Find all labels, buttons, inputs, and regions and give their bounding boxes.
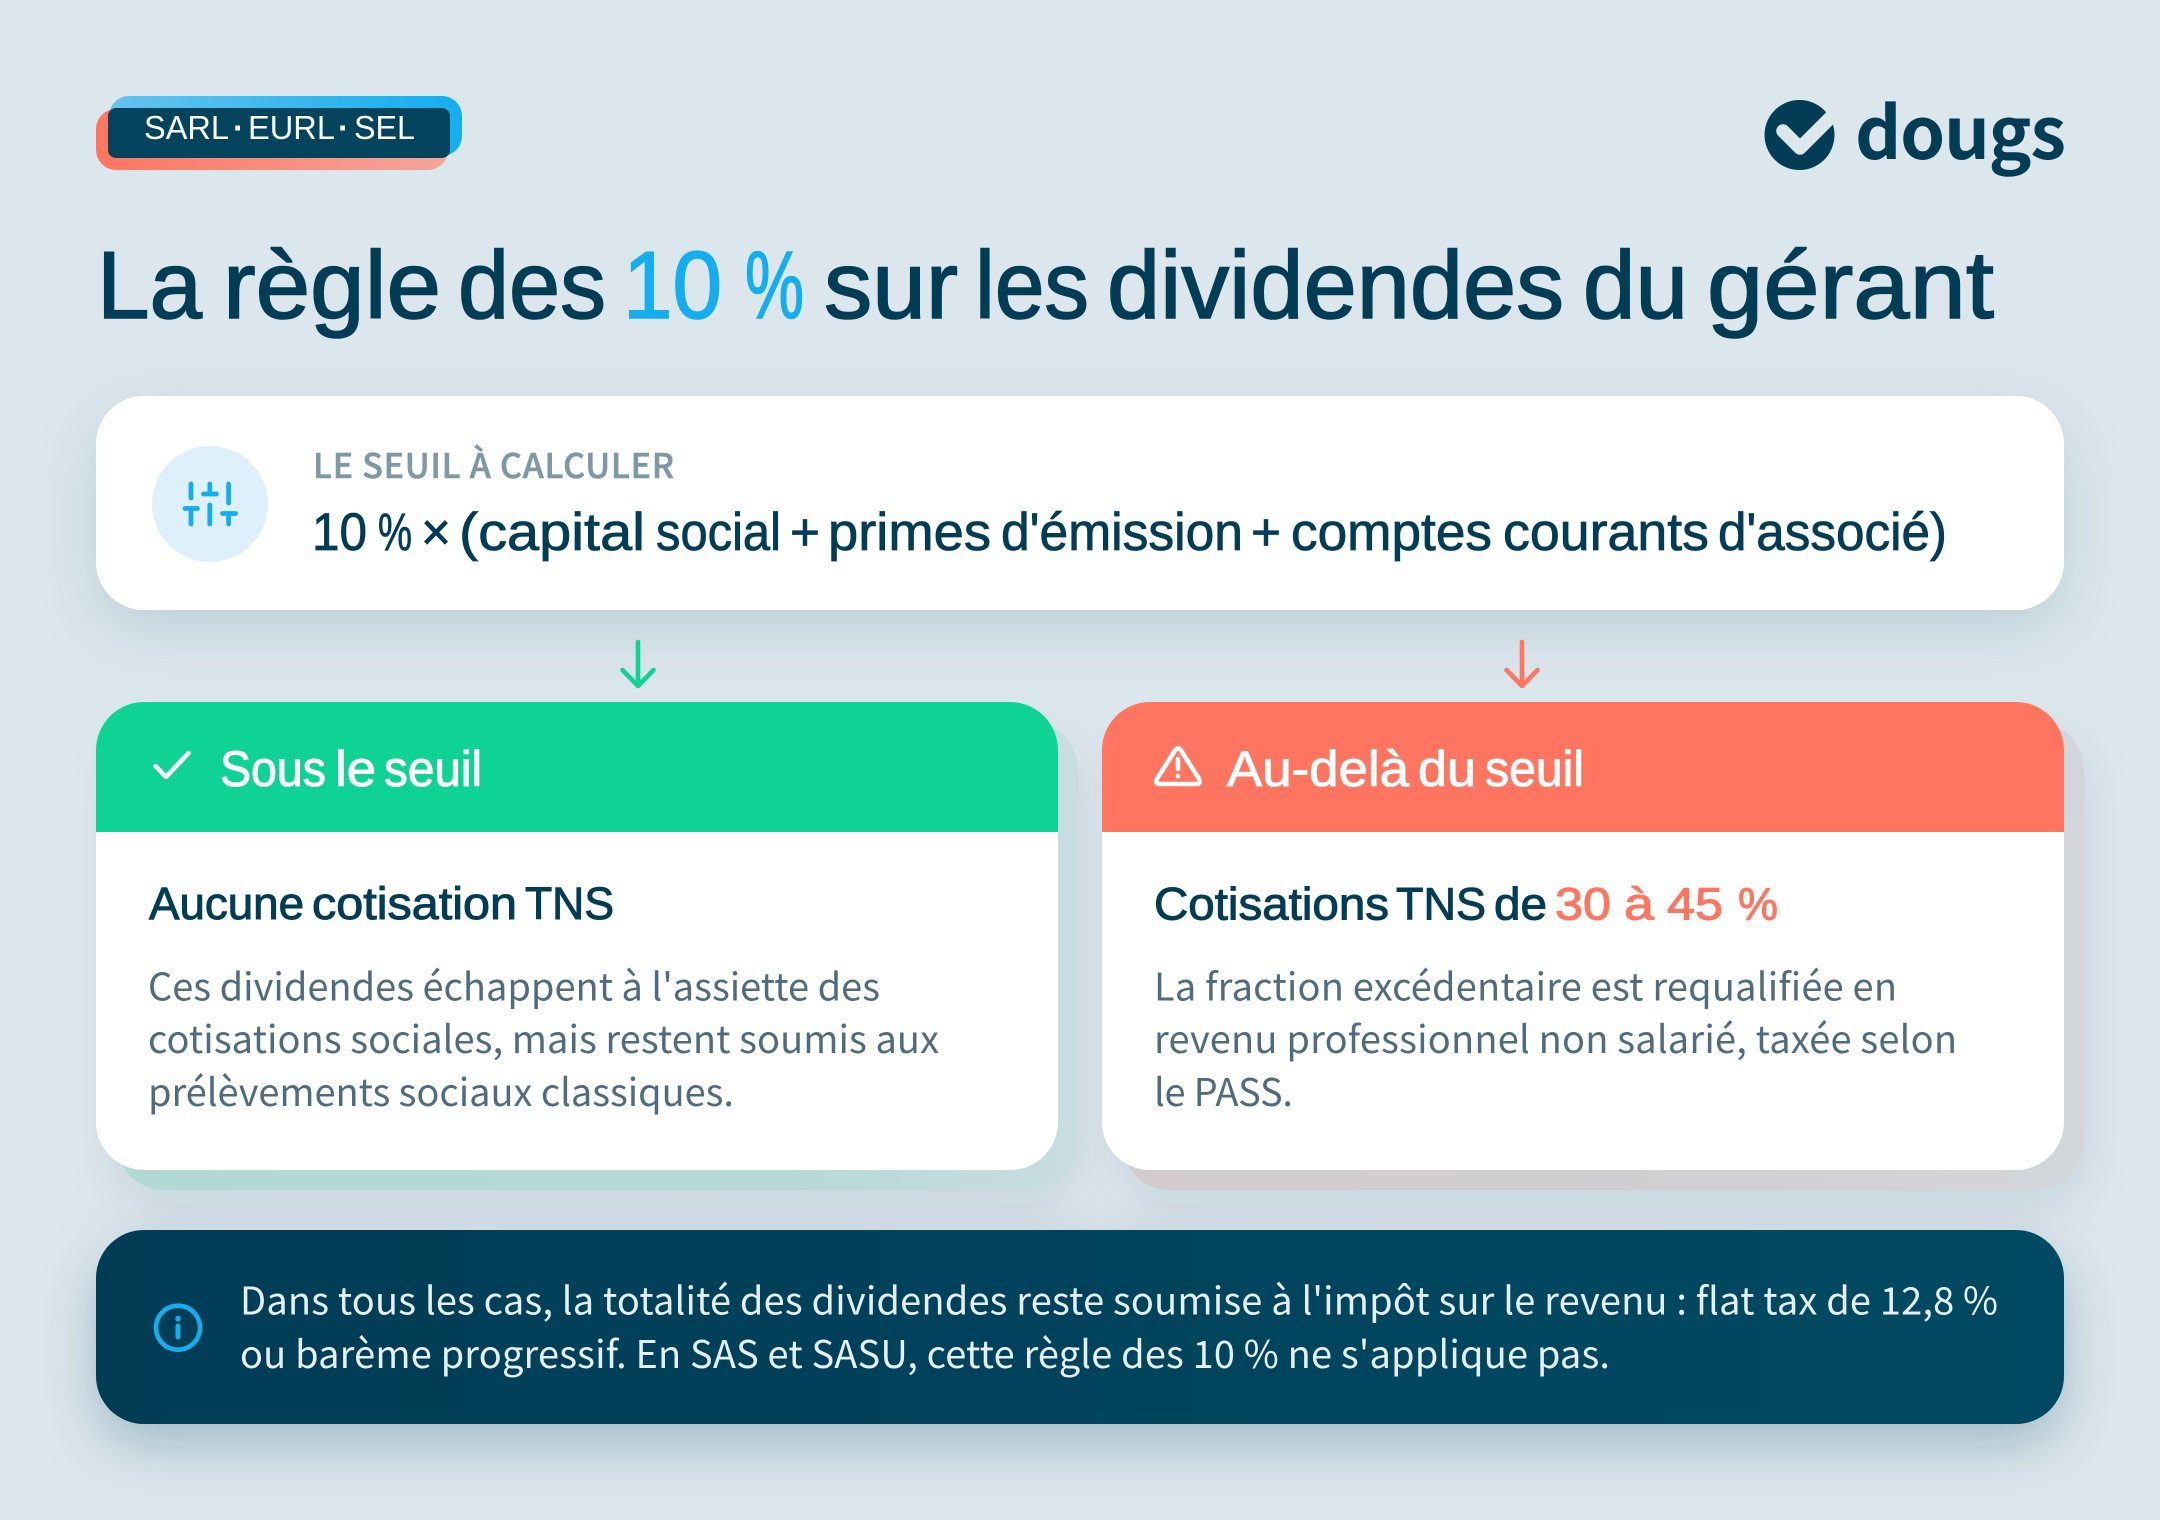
header: below threshold: seuil [384, 741, 482, 797]
formula text: primes [828, 503, 991, 562]
icon: warning [1156, 748, 1200, 784]
title: dividendes [1107, 232, 1564, 339]
formula text: + [790, 503, 820, 562]
label: threshold to compute: LE SEUIL À CALCULER [313, 439, 674, 488]
note text: Dans tous les cas, la totalité des dividendes reste soumise à l'impôt sur le revenu : flat tax de 12,8 % [240, 1270, 1998, 1326]
body text: above threshold: le PASS. [1154, 1062, 1293, 1117]
badge: legal forms: SEL [354, 109, 415, 146]
title: 10 [623, 232, 722, 339]
icon: check [156, 753, 188, 777]
subheading: contributions 30 to 45 %: 45 [1667, 878, 1723, 930]
formula text: d'associé) [1718, 503, 1947, 562]
subheading: contributions 30 to 45 %: de [1494, 878, 1547, 930]
title: La [97, 232, 203, 339]
body text: above threshold: revenu professionnel non salarié, taxée selon [1154, 1009, 1957, 1064]
formula text: 10 [312, 503, 367, 562]
formula text: d'émission [1001, 503, 1243, 562]
formula text: + [1251, 503, 1281, 562]
header: above threshold [1102, 702, 2064, 832]
panel: threshold formula [96, 396, 2064, 610]
arrow: to below threshold [622, 642, 654, 686]
formula text [312, 503, 1947, 562]
subheading: no contributions: TNS [525, 878, 614, 929]
badge: legal forms [96, 96, 462, 170]
subheading: contributions 30 to 45 % [1154, 878, 1778, 930]
subheading: contributions 30 to 45 %: % [1738, 878, 1778, 930]
body text: below threshold [148, 956, 939, 1117]
note text [240, 1270, 1998, 1379]
logo: dougs [1764, 75, 2066, 180]
panel: above threshold [1102, 702, 2084, 1190]
title: sur [824, 232, 958, 339]
formula text: % [378, 503, 412, 562]
logo: dougs: dougs [1855, 75, 2066, 180]
badge: legal forms: · [338, 109, 349, 146]
subheading: contributions 30 to 45 %: 30 [1555, 878, 1611, 930]
panel: below threshold [96, 702, 1078, 1190]
body text: above threshold [1154, 956, 1957, 1117]
header: below threshold: le [335, 741, 376, 797]
title: règle [223, 232, 441, 339]
title [97, 232, 1994, 339]
formula text: social [656, 503, 781, 562]
body text: below threshold: Ces dividendes échappent à l'assiette des [148, 956, 880, 1012]
icon: sliders [152, 446, 268, 562]
badge: legal forms: EURL [248, 109, 335, 146]
title: les [975, 232, 1089, 339]
badge: legal forms: SARL [144, 109, 229, 146]
body text: above threshold: La fraction excédentaire est requalifiée en [1154, 956, 1897, 1012]
header: above threshold: seuil [1485, 741, 1584, 797]
header: below threshold [96, 702, 1058, 832]
header: below threshold: Sous [220, 741, 326, 797]
title: % [745, 232, 804, 339]
icon: info [156, 1306, 200, 1350]
subheading: contributions 30 to 45 %: TNS [1396, 878, 1486, 930]
title: des [458, 232, 606, 339]
arrow: to above threshold [1506, 642, 1538, 686]
subheading: contributions 30 to 45 %: à [1624, 878, 1655, 930]
formula text: comptes [1291, 503, 1492, 562]
body text: below threshold: prélèvements sociaux classiques. [148, 1062, 734, 1117]
panel: information note [96, 1230, 2064, 1424]
header: above threshold: Au-delà [1227, 741, 1409, 797]
note text: ou barème progressif. En SAS et SASU, cette règle des 10 % ne s'applique pas. [240, 1324, 1610, 1379]
subheading: no contributions [149, 878, 614, 929]
body text: below threshold: cotisations sociales, mais restent soumis aux [148, 1009, 939, 1064]
subheading: no contributions: cotisation [312, 878, 517, 929]
header: above threshold: du [1418, 741, 1476, 797]
badge: legal forms: · [233, 109, 244, 146]
title: gérant [1707, 232, 1994, 339]
subheading: contributions 30 to 45 %: Cotisations [1154, 878, 1389, 930]
formula text: courants [1503, 503, 1709, 562]
formula text: (capital [459, 503, 645, 562]
formula text: × [421, 503, 451, 562]
subheading: no contributions: Aucune [149, 878, 304, 929]
title: du [1583, 232, 1688, 339]
